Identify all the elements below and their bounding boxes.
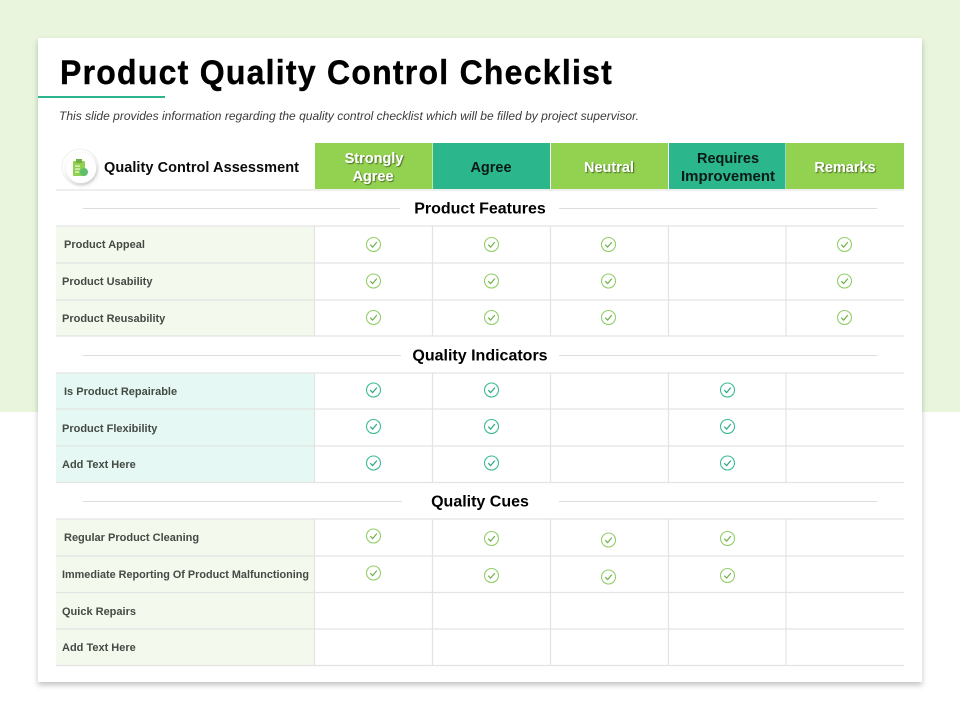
row: product appeal: Product Appeal <box>64 239 145 251</box>
row: is product repairable: Is Product Repairable <box>64 386 177 398</box>
title: Product Quality Control Checklist <box>60 53 612 91</box>
row: product usability: Product Usability <box>62 276 153 288</box>
row: regular product cleaning <box>64 529 734 547</box>
heading: quality indicators: Quality Indicators <box>412 348 548 364</box>
row: product flexibility: Product Flexibility <box>62 423 158 435</box>
header: agree: Agree <box>470 160 512 176</box>
header: neutral: Neutral <box>584 160 634 176</box>
header: strongly agree: Agree <box>352 169 394 185</box>
row: add text here: Add Text Here <box>62 642 136 654</box>
subtitle: This slide provides information regarding the quality control checklist which will be filled by project supervisor. <box>59 109 639 123</box>
row: quick repairs: Quick Repairs <box>62 606 136 618</box>
section label fills <box>56 227 314 336</box>
row: product usability <box>62 274 852 288</box>
row: immediate reporting: Immediate Reporting Of Product Malfunctioning <box>62 569 309 581</box>
header: agree <box>433 143 550 189</box>
icon: clipboard badge <box>62 149 98 185</box>
header: remarks: Remarks <box>814 160 876 176</box>
header: requires improvement: Improvement <box>681 169 775 185</box>
row: regular product cleaning: Regular Product Cleaning <box>64 532 199 544</box>
header: requires improvement <box>669 143 786 189</box>
background band <box>0 0 960 412</box>
heading: product features: Product Features <box>414 200 546 218</box>
row: product reusability: Product Reusability <box>62 313 166 325</box>
header: strongly agree <box>315 143 432 189</box>
heading: quality cues: Quality Cues <box>431 494 529 510</box>
row: product reusability <box>62 310 852 325</box>
row: is product repairable <box>64 383 734 398</box>
header: neutral <box>551 143 668 189</box>
row: product appeal <box>64 238 852 252</box>
row: add text here: Add Text Here <box>62 459 136 471</box>
column heading: assessment: Quality Control Assessment <box>104 160 299 176</box>
row: immediate reporting <box>62 566 734 584</box>
title underline <box>38 96 165 98</box>
header: strongly agree: Strongly <box>345 151 403 167</box>
header: remarks <box>786 143 904 189</box>
header: requires improvement: Requires <box>697 151 759 167</box>
row: add text here <box>62 456 734 471</box>
row: product flexibility <box>62 420 734 435</box>
